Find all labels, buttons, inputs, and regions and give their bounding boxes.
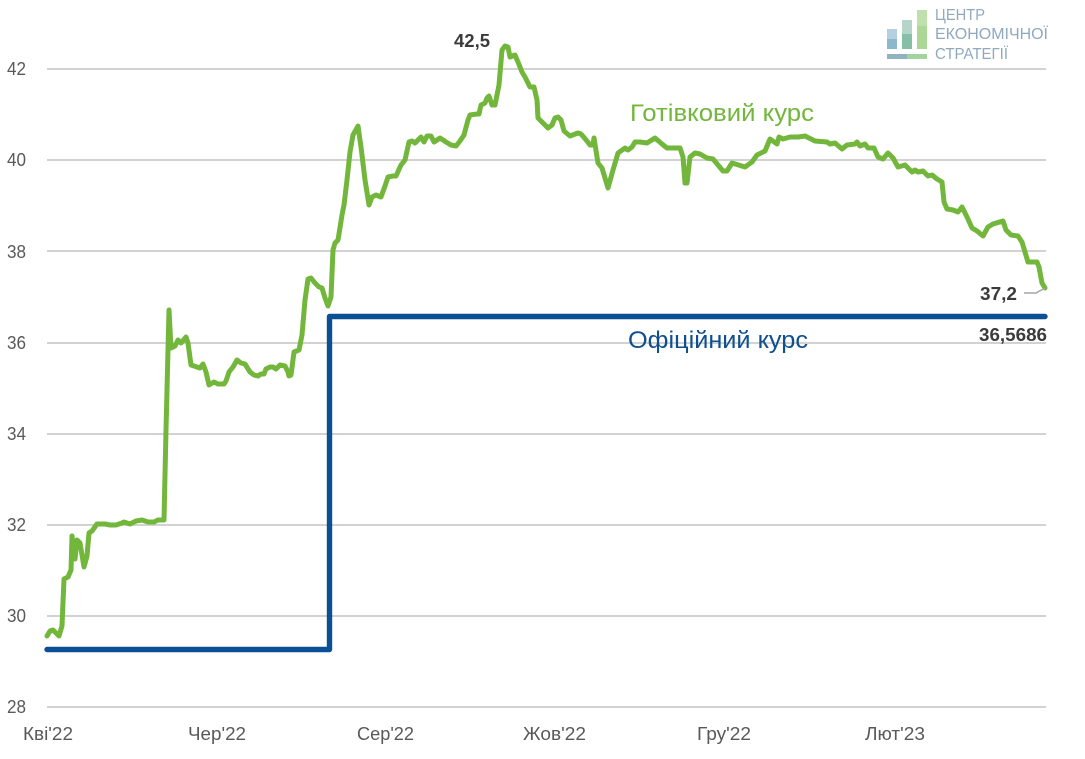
x axis labels xyxy=(23,724,925,744)
y axis labels: 42 xyxy=(7,59,26,79)
x axis labels: Гру'22 xyxy=(697,724,751,744)
x axis labels: Сер'22 xyxy=(357,724,414,744)
value: official rate: 36,5686 xyxy=(979,325,1047,345)
label: cash rate: Готівковий курс xyxy=(630,100,814,127)
x axis labels: Лют'23 xyxy=(865,724,925,744)
y axis labels: 28 xyxy=(7,697,26,717)
logo: ЦЕНТР xyxy=(935,7,985,24)
official rate line xyxy=(47,316,1045,650)
y axis labels: 38 xyxy=(7,242,26,262)
x axis labels: Кві'22 xyxy=(23,724,73,744)
logo: СТРАТЕГІЇ xyxy=(935,45,1009,63)
y axis labels: 32 xyxy=(7,515,26,535)
leader line for last value xyxy=(1024,288,1045,293)
x axis labels: Чер'22 xyxy=(188,724,246,744)
cash rate line xyxy=(47,46,1045,636)
logo xyxy=(887,7,1049,63)
y axis labels: 30 xyxy=(7,606,26,626)
label: official rate: Офіційний курс xyxy=(628,327,808,354)
y axis labels: 34 xyxy=(7,424,26,444)
y axis labels: 36 xyxy=(7,333,26,353)
y axis labels: 40 xyxy=(7,150,26,170)
y axis labels xyxy=(7,59,26,717)
value: peak: 42,5 xyxy=(454,31,490,51)
value: latest cash rate: 37,2 xyxy=(980,284,1017,304)
x axis labels: Жов'22 xyxy=(523,724,586,744)
logo: ЕКОНОМІЧНОЇ xyxy=(935,25,1049,43)
